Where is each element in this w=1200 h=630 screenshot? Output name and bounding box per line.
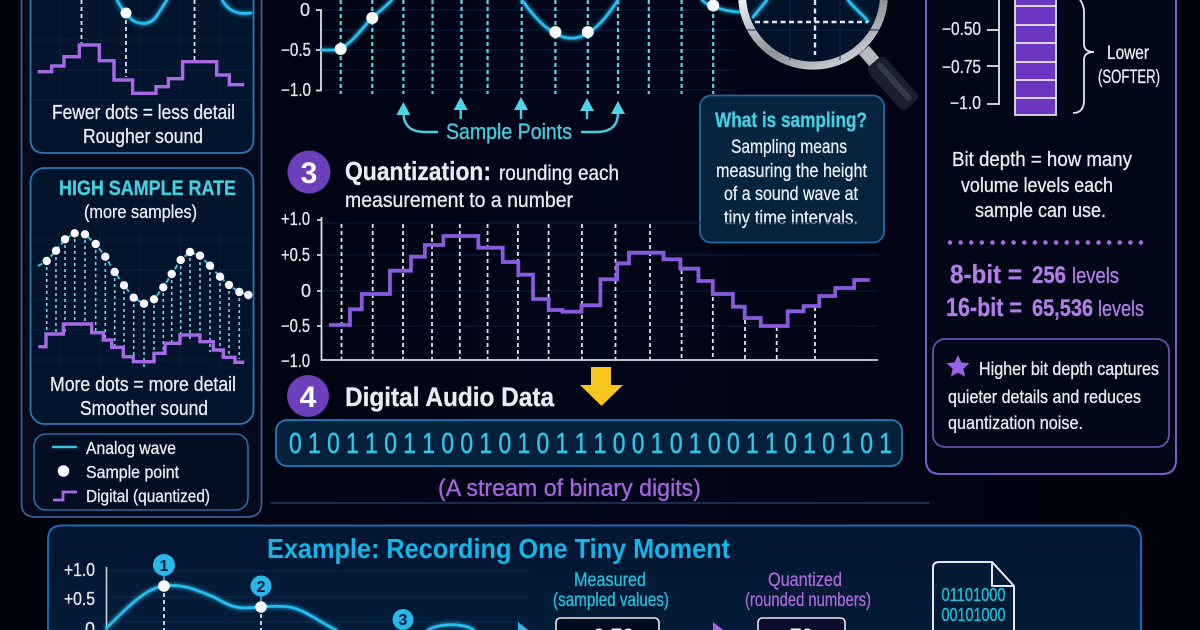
8-bit levels: 256 bbox=[1032, 262, 1066, 289]
callout text: quieter details and reduces bbox=[948, 386, 1141, 407]
16-bit levels: 16-bit = bbox=[946, 292, 1022, 322]
y axis labels bbox=[281, 0, 311, 100]
panel: low sample rate bbox=[30, 0, 254, 153]
y axis labels: 0 bbox=[300, 0, 310, 20]
quantized y axis labels: −0.5 bbox=[281, 316, 310, 336]
y axis bbox=[316, 10, 321, 90]
badge: step 4 bbox=[287, 375, 329, 417]
bit depth scale: −0.50 bbox=[942, 19, 981, 39]
y axis labels: −1.0 bbox=[281, 80, 311, 100]
badge: step 4: 4 bbox=[300, 381, 317, 414]
binary caption: (A stream of binary digits) bbox=[438, 475, 701, 502]
binary stream box: 0 1 0 1 1 0 1 1 0 0 1 0 1 0 1 1 1 0 0 1 0 1 0 0 1 1 0 1 0 1 0 1 bbox=[289, 428, 892, 460]
high rate caption: Smoother sound bbox=[80, 398, 208, 420]
icon: magnifying glass bbox=[742, 0, 920, 112]
low rate sample guides bbox=[82, 0, 194, 77]
quantized column: (rounded numbers) bbox=[745, 590, 871, 611]
quantized sample guides bbox=[342, 224, 815, 359]
8-bit levels bbox=[950, 259, 1119, 289]
sample guides bbox=[341, 0, 713, 94]
8-bit levels: levels bbox=[1072, 263, 1119, 288]
high rate subtitle: (more samples) bbox=[84, 201, 197, 222]
panel: example recording one tiny moment bbox=[48, 526, 1141, 630]
icon: binary file: 01101000 bbox=[942, 585, 1006, 605]
sample points label with arrows: Sample Points bbox=[446, 119, 572, 144]
quantized y axis labels: −1.0 bbox=[281, 351, 310, 371]
callout text bbox=[948, 358, 1159, 433]
marker 2: 2 bbox=[257, 579, 266, 596]
callout: what is sampling: Sampling means bbox=[731, 137, 847, 158]
example title: Example: Recording One Tiny Moment bbox=[267, 533, 730, 564]
high rate sample dots bbox=[42, 229, 252, 308]
heading: quantization: measurement to a number bbox=[345, 188, 573, 212]
bit depth scale: −0.75 bbox=[942, 57, 981, 77]
quantized column: Quantized bbox=[768, 570, 842, 591]
sample dots bbox=[335, 0, 719, 55]
bit depth scale: −1.0 bbox=[950, 93, 981, 113]
chart: quantized wave bbox=[281, 209, 878, 371]
measured column: Measured bbox=[574, 570, 646, 591]
high rate sample guides bbox=[47, 233, 239, 369]
lower softer label: Lower bbox=[1107, 43, 1150, 64]
badge: step 3: 3 bbox=[301, 157, 317, 190]
8-bit levels: 8-bit = bbox=[950, 259, 1022, 289]
quantized y axis bbox=[317, 217, 878, 360]
measured column bbox=[553, 570, 669, 630]
low rate caption: Fewer dots = less detail bbox=[52, 102, 235, 124]
marker 3: 3 bbox=[399, 612, 408, 629]
heading: quantization: Quantization: bbox=[345, 156, 491, 186]
arrow to quantized bbox=[713, 622, 723, 630]
quantized y axis labels: 0 bbox=[301, 281, 311, 301]
bit depth definition: volume levels each bbox=[961, 174, 1113, 197]
example y axis: +0.5 bbox=[64, 589, 95, 609]
bit depth definition: Bit depth = how many bbox=[952, 148, 1133, 171]
heading: quantization: rounding each bbox=[499, 161, 619, 185]
analog wave bbox=[322, 0, 742, 50]
callout text: quantization noise. bbox=[948, 412, 1083, 433]
example y axis: +1.0 bbox=[64, 560, 95, 580]
level bar bbox=[1015, 0, 1056, 115]
panel: high sample rate bbox=[30, 168, 254, 424]
legend bbox=[34, 434, 248, 510]
panel: bit depth bbox=[926, 0, 1176, 474]
panel: sampling chart bbox=[281, 0, 742, 144]
16-bit levels: levels bbox=[1098, 296, 1144, 321]
callout: what is sampling: What is sampling? bbox=[715, 109, 867, 132]
example analog wave bbox=[106, 585, 474, 630]
example guides bbox=[164, 586, 261, 630]
high rate analog wave bbox=[38, 233, 248, 304]
low rate digital step line bbox=[38, 45, 244, 93]
icon: star bbox=[947, 355, 969, 377]
quantized column bbox=[745, 570, 871, 630]
callout: what is sampling: of a sound wave at bbox=[724, 184, 859, 205]
callout: higher bit depth bbox=[933, 339, 1169, 447]
heading: digital audio data: Digital Audio Data bbox=[345, 382, 554, 412]
y axis labels: −0.5 bbox=[281, 40, 311, 60]
brace bbox=[1073, 0, 1094, 113]
quantized step line bbox=[329, 236, 870, 326]
callout text: Higher bit depth captures bbox=[979, 358, 1159, 379]
16-bit levels bbox=[946, 292, 1144, 322]
high rate title: HIGH SAMPLE RATE bbox=[59, 177, 236, 200]
bit depth scale bbox=[942, 0, 999, 113]
low rate analog wave bbox=[117, 0, 251, 24]
high rate caption: More dots = more detail bbox=[50, 374, 236, 396]
arrow: down to digital data bbox=[580, 367, 623, 406]
low rate caption bbox=[52, 102, 235, 148]
bit depth definition bbox=[952, 148, 1133, 222]
legend: sample point: Sample point bbox=[86, 462, 179, 482]
marker 1 bbox=[153, 554, 175, 592]
badge: step 3 bbox=[288, 150, 330, 194]
legend: digital quantized: Digital (quantized) bbox=[86, 486, 210, 506]
callout: what is sampling: tiny time intervals. bbox=[724, 208, 858, 229]
callout: what is sampling bbox=[700, 96, 884, 242]
marker 2 bbox=[250, 576, 272, 613]
icon: binary file bbox=[933, 562, 1014, 630]
icon: binary file: 00101000 bbox=[942, 605, 1006, 625]
quantized y axis labels: +1.0 bbox=[281, 209, 310, 229]
legend: analog wave: Analog wave bbox=[86, 438, 176, 458]
lower softer label: (SOFTER) bbox=[1098, 67, 1160, 88]
binary stream box bbox=[276, 420, 902, 466]
heading: quantization bbox=[345, 156, 619, 212]
lower softer label bbox=[1098, 43, 1160, 88]
sample points label with arrows bbox=[396, 97, 625, 144]
marker 3 bbox=[392, 609, 414, 630]
arrow to measured bbox=[518, 622, 528, 630]
quantized y axis labels bbox=[281, 209, 311, 371]
low rate caption: Rougher sound bbox=[83, 126, 203, 148]
bit depth definition: sample can use. bbox=[975, 199, 1106, 222]
low rate sample dot bbox=[120, 8, 132, 18]
example y axis bbox=[64, 560, 106, 630]
marker 1: 1 bbox=[160, 558, 169, 575]
high rate caption bbox=[50, 374, 236, 420]
panel: sample rate comparison bbox=[22, 0, 262, 517]
16-bit levels: 65,536 bbox=[1032, 295, 1093, 322]
callout: what is sampling: measuring the height bbox=[716, 161, 868, 182]
measured column: (sampled values) bbox=[553, 590, 669, 611]
quantized y axis labels: +0.5 bbox=[281, 245, 310, 265]
legend: analog wave bbox=[52, 438, 176, 458]
high rate digital step line bbox=[38, 324, 244, 362]
